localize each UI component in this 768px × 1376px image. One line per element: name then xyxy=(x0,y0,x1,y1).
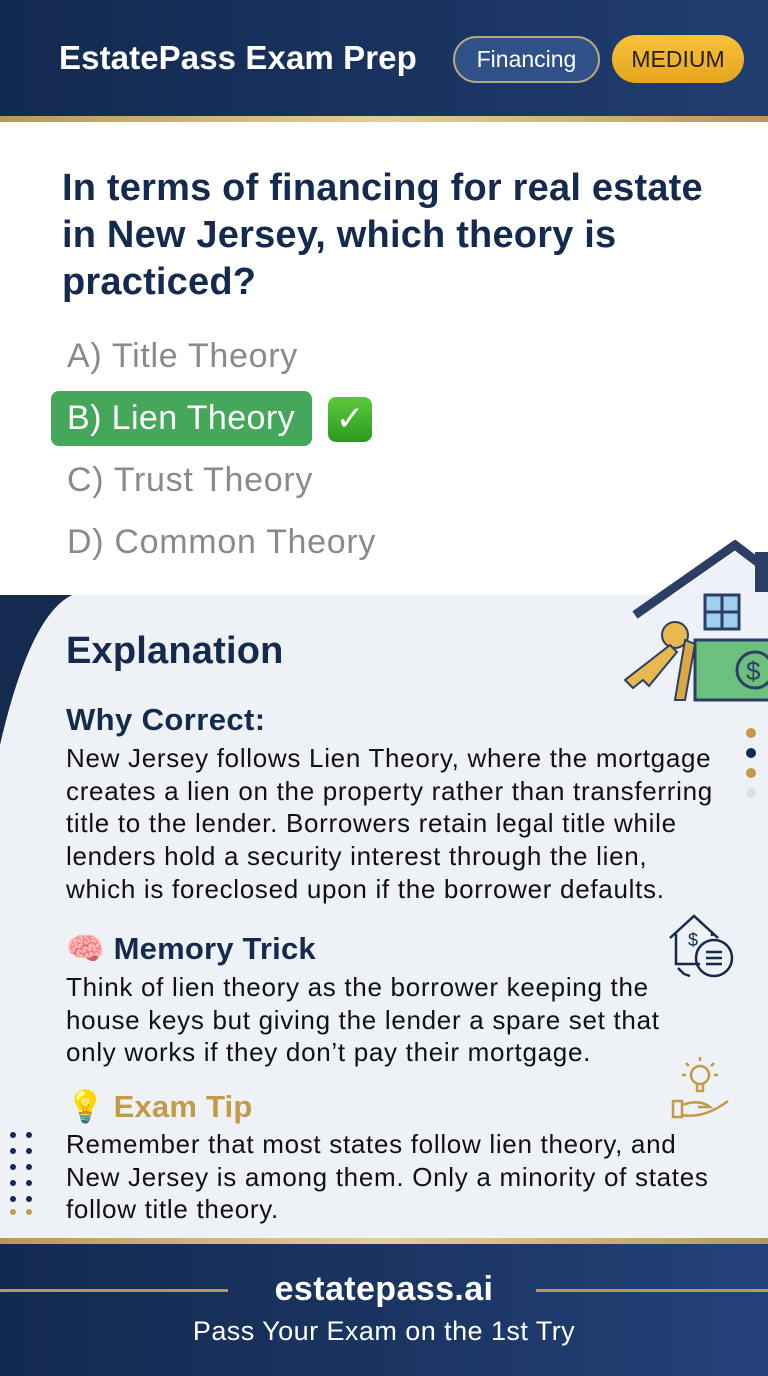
footer site name: estatepass.ai xyxy=(275,1270,493,1308)
decorative dots left xyxy=(10,1132,32,1215)
header bar xyxy=(0,0,768,118)
text: exam tip: New Jersey is among them. Only a minority of states xyxy=(66,1162,709,1192)
tag: MEDIUM: MEDIUM xyxy=(631,46,725,72)
text: why correct: lenders hold a security interest through the lien, xyxy=(66,841,647,871)
heading: explanation: Explanation xyxy=(66,630,284,672)
tag: Financing xyxy=(453,36,600,83)
heading: exam tip: 💡 Exam Tip xyxy=(66,1089,252,1124)
tag: Financing: Financing xyxy=(477,46,576,72)
option C: C) Trust Theory xyxy=(67,461,313,499)
text: why correct: New Jersey follows Lien Theory, where the mortgage xyxy=(66,743,711,773)
option D: D) Common Theory xyxy=(67,523,376,561)
footer tagline: Pass Your Exam on the 1st Try xyxy=(193,1316,575,1346)
header title: EstatePass Exam Prep xyxy=(59,39,417,76)
icon: check: ✓ xyxy=(336,400,364,438)
question text: in New Jersey, which theory is xyxy=(62,214,616,256)
text: exam tip: follow title theory. xyxy=(66,1194,279,1224)
text: exam tip: Remember that most states follow lien theory, and xyxy=(66,1129,676,1159)
text: memory trick: only works if they don’t pay their mortgage. xyxy=(66,1037,591,1067)
text: why correct: title to the lender. Borrowers retain legal title while xyxy=(66,808,677,838)
panel: explanation xyxy=(0,595,768,1240)
heading: why correct: Why Correct: xyxy=(66,702,265,737)
text: why correct: which is foreclosed upon if the borrower defaults. xyxy=(66,874,665,904)
text: why correct: creates a lien on the property rather than transferring xyxy=(66,776,713,806)
option B correct: B) Lien Theory xyxy=(67,399,295,437)
icon: lightbulb hand xyxy=(672,1057,729,1118)
question text xyxy=(62,167,703,303)
tag: MEDIUM xyxy=(612,35,744,83)
decorative dots right xyxy=(746,728,756,798)
option B correct xyxy=(51,391,312,446)
icon: check xyxy=(328,397,372,442)
icon: house money: $ xyxy=(688,930,698,950)
footer xyxy=(0,1244,768,1376)
answer options xyxy=(51,337,376,561)
text: exam tip xyxy=(66,1129,709,1224)
text: memory trick xyxy=(66,972,660,1067)
icon: house money xyxy=(669,914,734,978)
heading: memory trick: 🧠 Memory Trick xyxy=(66,931,316,966)
text: why correct xyxy=(66,743,713,904)
illustration: house keys money xyxy=(624,540,768,702)
text: memory trick: house keys but giving the lender a spare set that xyxy=(66,1005,660,1035)
option A: A) Title Theory xyxy=(67,337,298,375)
illustration: house keys money: $ xyxy=(746,656,761,686)
text: memory trick: Think of lien theory as the borrower keeping the xyxy=(66,972,649,1002)
question text: practiced? xyxy=(62,261,256,303)
question text: In terms of financing for real estate xyxy=(62,167,703,209)
